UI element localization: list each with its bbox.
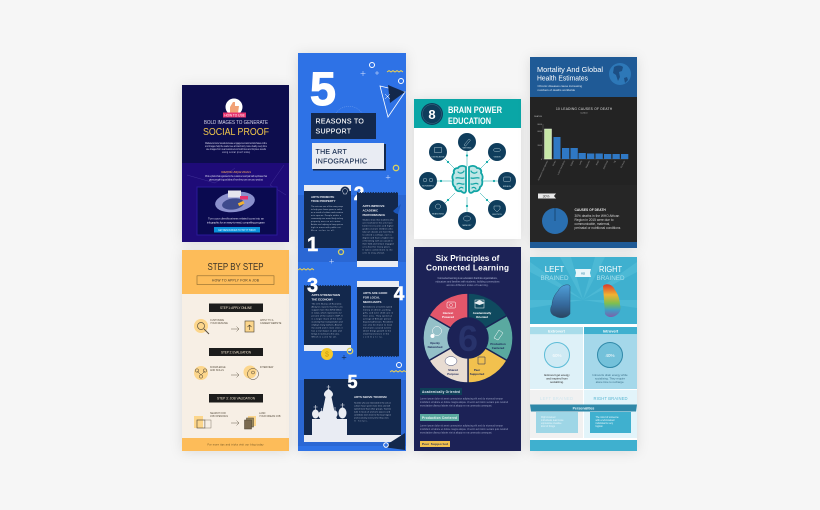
icon: right brain (603, 284, 621, 317)
section: left brained (530, 390, 583, 438)
bar chart: leading causes of death: DEATHS (534, 115, 543, 118)
icon hub: emotion: EMOTION (492, 214, 502, 216)
ribbon: personalities: Personalities (573, 406, 594, 410)
card 2: arts improve performance (357, 193, 401, 267)
card 3: arts strengthen economy: is a larger share of the total (312, 318, 342, 320)
bar chart: leading causes of death (534, 107, 628, 181)
segment label: interest powered: Powered (442, 315, 454, 319)
text block: production centered: incididunt ut labore et dolore magna aliqua. Ut enim ad minim veniam quis nostrud (420, 428, 509, 431)
column: extrovert stat: 60% (552, 353, 562, 358)
callout box (197, 187, 277, 235)
icon hub: vision: VISION (494, 156, 501, 158)
icon hub: knowledge: KNOWLEDGE (431, 156, 445, 158)
number 4: 4 (394, 284, 405, 305)
card 5: arts serve tourism: spend more than other groups. Tourists (354, 408, 391, 410)
title box: reasons to support: REASONS TO (316, 118, 364, 126)
decorative ring and plus (329, 250, 344, 264)
bar chart: leading causes of death: Lower respiratory (557, 160, 566, 175)
step 3 icons: LAND (259, 412, 266, 415)
title box: the art infographic: INFOGRAPHIC (316, 158, 367, 166)
card 2: arts improve performance: Studies show that students who (362, 218, 394, 222)
bar chart: leading causes of death: Road (596, 161, 600, 166)
step 1 icons: CUSTOMIZE (210, 319, 224, 322)
card 4: arts good for merchants: ARTS ARE GOOD (363, 291, 387, 295)
step 1 icons: CAREER WEBSITE (260, 322, 282, 325)
bar chart: leading causes of death: Stroke (552, 159, 557, 167)
text block: causes of death: perinatal or nutritional conditions (574, 226, 621, 230)
column: introvert stat: Introverts drain energy while (592, 373, 628, 377)
step 1 bar (209, 304, 263, 312)
card 3: arts strengthen economy: ARTS STRENGTHEN (312, 293, 340, 297)
card 2: arts improve performance: ARTS IMPROVE (362, 204, 385, 208)
text block: intro: Marketers know visuals increase engagement and social shares online (205, 142, 268, 145)
icon hub: reasoning: REASONING (432, 212, 444, 216)
bar chart: leading causes of death: TB (614, 160, 617, 164)
card 3: arts strengthen economy (304, 286, 351, 351)
step 1 icons (194, 319, 282, 334)
segment label: peer supported: Supported (470, 372, 484, 376)
card 5: arts serve tourism (304, 379, 401, 442)
bar chart: leading causes of death: 0 (541, 159, 543, 161)
panel: step by step infographic (182, 250, 289, 451)
zigzag (298, 268, 314, 270)
card 3: arts strengthen economy: Which is a win for all. (312, 336, 337, 338)
card 3: arts strengthen economy: Analysis reports that the arts (312, 306, 342, 308)
icon hub: movement: MOVEMENT (422, 186, 435, 188)
tag: academically oriented (420, 388, 462, 395)
pie chart (542, 208, 568, 234)
panel: six principles of connected learning (414, 247, 521, 451)
step 3 icons: YOUR DREAM JOB (259, 415, 281, 418)
card 1: arts promote property: as a result of culture and creative (311, 211, 344, 214)
column: extrovert stat: and inspired from (546, 376, 568, 380)
card 2: arts improve performance: their field and remain engaged (362, 242, 394, 246)
text block: purple section: gives people a good idea of how they can use your product (209, 178, 263, 182)
bar chart: leading causes of death: Ischaemic heart disease (537, 159, 549, 181)
text block: production centered: exercitation ullamco laboris nisi ut aliquip ex ea commodo consequat. (420, 432, 492, 434)
card 1: arts promote property: arts spaces. People within a (311, 214, 342, 217)
icon hub: memory: MEMORY (463, 225, 472, 227)
heading: right brained: RIGHT (599, 265, 622, 274)
step 2 icons: KNOWLEDGE (210, 366, 226, 369)
donut chart: six principles (423, 293, 513, 383)
number 2: 2 (354, 184, 364, 205)
step 2 icons: INTERVIEW (260, 366, 274, 369)
card 3: arts strengthen economy: employs many workers. Around (312, 324, 342, 326)
column: extrovert stat: socializing. (550, 380, 564, 384)
bar chart: leading causes of death: Cirrhosis (621, 161, 626, 169)
card 3: arts strengthen economy: brings in revenue to the area. (312, 332, 340, 336)
card 5: arts serve tourism: culture have spent more time and will (354, 404, 391, 408)
segment label: production centered: Production (490, 342, 506, 346)
card 1: arts promote property: More value to all. (311, 229, 335, 232)
card 3: arts strengthen economy: in value, which represents 4.2 (312, 312, 342, 314)
ribbon: vs: VS (581, 272, 585, 276)
text block: intro: use images from real customers to build trust and improve results (206, 148, 267, 151)
segment label: peer supported (470, 357, 485, 376)
panel: social proof infographic (182, 85, 289, 242)
card 4: arts good for merchants: merchants around events (363, 326, 391, 330)
section: right brained: individual is very (596, 422, 614, 425)
card 4: arts good for merchants: gifts, and even child care in (363, 312, 394, 314)
tag: peer supported: Peer Supported (422, 442, 448, 446)
segment label: production centered: Centered (492, 346, 504, 350)
card 1: arts promote property: The arts are one of the many ways (311, 205, 343, 208)
tag: peer supported (420, 441, 450, 447)
icon: brain (452, 166, 483, 193)
segment label: interest powered (442, 302, 456, 319)
card 4: arts good for merchants: beyond admission. Residents (363, 320, 393, 324)
segment label: shared purpose (445, 356, 459, 376)
footer band (530, 440, 637, 451)
card 2: arts improve performance: It takes commitment to the (362, 248, 393, 252)
section: left brained: LEFT BRAINED (540, 396, 573, 401)
card 5: arts serve tourism: and economy every time they visit. (354, 416, 389, 420)
title box: reasons to support (311, 113, 376, 139)
step 1 bar: STEP 1: APPLY ONLINE (220, 306, 252, 310)
number 5 small: 5 (347, 372, 358, 392)
card 3: arts strengthen economy: The U.S. Bureau of Economic (312, 302, 342, 306)
step 1 icons: YOUR RESUME (210, 322, 228, 325)
card 4: arts good for merchants: MERCHANTS (363, 300, 382, 304)
segment label: academically oriented (473, 300, 492, 319)
segment label: openly networked (428, 326, 443, 349)
icon: thumbs up badge: HOW TO USE (224, 114, 245, 118)
bar chart: leading causes of death: number (580, 112, 588, 114)
tag: production centered: Production Centered (422, 416, 457, 420)
bar chart: leading causes of death: Diarrhoeal (603, 160, 609, 170)
text block: causes of death (574, 208, 621, 230)
step 2 icons: AND SKILLS (210, 369, 224, 372)
step 3 icons: SEARCH FOR (210, 412, 226, 415)
text block: causes of death: 30% deaths in the WHO African (574, 214, 620, 218)
column: introvert stat (584, 335, 637, 389)
card 2: arts improve performance: better test scores and higher (362, 224, 394, 228)
card 1: arts promote property: TRUE PROPERTY (311, 199, 336, 203)
panel: brain power education (414, 99, 521, 239)
step 3 bar (209, 394, 263, 402)
decorative icons: triangle and rings (336, 62, 405, 180)
column header: extrovert: Extrovert (548, 330, 566, 334)
subtitle: numbers of deaths worldwide (538, 88, 575, 92)
text block: intro: and images help the reader see a brand story more clearly every time (205, 145, 268, 148)
subtitle: Chronic diseases cause increasing (538, 84, 583, 88)
card 1: arts promote property (304, 185, 351, 248)
ribbon: 30 percent: 30% (543, 194, 549, 198)
heading: social proof: SOCIAL PROOF (203, 127, 269, 138)
card 4: arts good for merchants: Attendees to art events spend (363, 306, 393, 308)
icon: thumbs up badge (223, 98, 246, 118)
card 4: arts good for merchants: which brings growth to the (363, 330, 392, 332)
section: left brained: kind of things (541, 425, 556, 428)
column: extrovert stat: Extrovert get energy (544, 373, 570, 377)
heading: six principles: Connected Learning (426, 264, 509, 272)
card 2: arts improve performance: are involved in the arts have (362, 222, 393, 224)
card 4: arts good for merchants (357, 281, 399, 356)
card 4: arts good for merchants: small businesses in the (363, 332, 390, 336)
segment label: peer supported: Peer (474, 368, 481, 372)
bar chart: leading causes of death: 6000 (538, 131, 543, 133)
icon: lightbulb (340, 186, 350, 196)
column: introvert stat: socializing. They require (595, 376, 625, 380)
title box: the art infographic: THE ART (316, 149, 347, 156)
bar chart: leading causes of death: 2000 (538, 145, 543, 147)
icon: coin (321, 348, 353, 360)
card 4: arts good for merchants: their area. They spend an (363, 314, 393, 318)
text block: academically oriented: Lorem ipsum dolor sit amet consectetur adipiscing elit sed do eiusmod tempor (420, 398, 503, 400)
segment label: interest powered: Interest (443, 311, 453, 315)
subtitle box (197, 276, 274, 284)
card 4: arts good for merchants: FOR LOCAL (363, 296, 380, 300)
ribbon: 30 percent (538, 194, 556, 198)
step 3 icons: JOB OPENINGS (210, 415, 228, 418)
number 1: 1 (307, 234, 318, 256)
card 2: arts improve performance: degree and have a higher rate (362, 236, 394, 240)
text block: causes of death: Region in 2015 were due to (574, 218, 614, 222)
bar chart: leading causes of death: Diabetes (585, 160, 591, 169)
card 2: arts improve performance: to attend a college, earn a (362, 234, 392, 236)
card 5: arts serve tourism: It helps. (354, 420, 368, 422)
card 2: arts improve performance: of finishing with an award in (362, 240, 393, 242)
column: introvert stat: 40% (605, 353, 615, 358)
card 4: arts good for merchants: average of $31 per person (363, 318, 392, 320)
intro text: Connected learning is an education that links organizations, (438, 277, 498, 280)
section: right brained: The mind of someone (596, 416, 619, 419)
segment label: production centered (490, 330, 506, 350)
icon: left brain (551, 285, 570, 318)
card 2: arts improve performance: at school for many years. (362, 246, 391, 248)
step 3 bar: STEP 3: JOB VALIDATION (217, 396, 256, 400)
text block: purple section: Pick a photo that represents the customer and pair with a phrase that (205, 175, 267, 178)
card 3: arts strengthen economy: THE ECONOMY (312, 298, 333, 302)
card 3: arts strengthen economy: has a real impact on jobs and (312, 330, 342, 332)
column header: introvert: Introvert (603, 330, 619, 334)
panel: left brained vs right brained (530, 257, 637, 451)
section: left brained: expressive creative (541, 422, 562, 425)
subtitle box: HOW TO APPLY FOR A JOB (212, 278, 260, 282)
bar chart: leading causes of death: COPD (571, 160, 575, 167)
card 4: arts good for merchants: money on dinner, parking, (363, 308, 391, 312)
text block: causes of death: communicable, maternal, (574, 222, 610, 226)
card 1: arts promote property: high in areas with public art. (311, 226, 341, 229)
column header: introvert (584, 327, 637, 334)
step 2 bar: STEP 2: EVALUATION (221, 350, 252, 354)
segment label: openly networked: Openly (430, 341, 440, 345)
section: left brained: individuals lead more (541, 419, 564, 422)
card 5: arts serve tourism: ARTS SERVE TOURISM (354, 395, 387, 399)
heading: brain power education: EDUCATION (448, 116, 491, 127)
callout box: Turn your client/business related icons into an (208, 216, 264, 220)
section: right brained: RIGHT BRAINED (594, 396, 628, 401)
card 2: arts improve performance: grades overall. Children who (362, 228, 393, 230)
text block: academically oriented: incididunt ut labore et dolore magna aliqua. Ut enim ad minim veniam quis nostrud (420, 401, 509, 404)
bar chart: leading causes of death: 10 LEADING CAUSES OF DEATH (556, 107, 613, 111)
ribbon: personalities (530, 404, 637, 412)
segment label: academically oriented: Oriented (476, 315, 488, 319)
bar chart: leading causes of death: 8000 (538, 124, 543, 126)
column: introvert stat: alone time to recharge. (596, 380, 625, 384)
bar chart: leading causes of death: Lung (579, 161, 583, 165)
heading: six principles: Six Principles of (436, 254, 500, 263)
segment label: shared purpose: Shared (448, 368, 458, 372)
panel: reasons to support art (298, 53, 406, 451)
card 1: arts promote property: to help your home grow in value (311, 208, 343, 211)
heading: brain power education: BRAIN POWER (448, 105, 502, 116)
step 2 icons (194, 366, 274, 380)
section: right brained (584, 390, 637, 438)
card 5: arts serve tourism: take in local art and arts spaces and (354, 410, 391, 414)
heading: left brained: LEFT (545, 265, 564, 274)
tag: academically oriented: Academically Oriented (422, 390, 460, 394)
heading: mortality: Mortality And Global (537, 67, 603, 74)
card 2: arts improve performance: PERFORMANCE (362, 213, 385, 217)
column: extrovert stat (530, 335, 583, 389)
section: left brained: Right-brained (541, 416, 556, 419)
decorative corner triangle (383, 433, 405, 450)
card 3: arts strengthen economy: percent of the nation's GDP. It (312, 314, 343, 318)
card 2: arts improve performance: take art classes are more likely (362, 230, 394, 234)
footer note: For more tips and tricks visit our blog today (208, 444, 264, 446)
ribbon: vs (575, 269, 591, 277)
number 3: 3 (307, 275, 318, 297)
segment label: shared purpose: Purpose (447, 372, 459, 376)
step 2 bar (209, 348, 263, 356)
icon hub: writing: WRITING (463, 148, 472, 150)
icon: onion dome cathedral (312, 385, 347, 436)
card 1: arts promote property: community are more likely to buy (311, 217, 344, 220)
section: right brained: with a left-brained (596, 419, 615, 422)
panel: mortality and global health (530, 57, 637, 248)
title box: reasons to support: SUPPORT (316, 128, 352, 136)
decorative ring and zigzag (390, 362, 406, 372)
heading: right brained: BRAINED (596, 275, 625, 282)
text block: academically oriented: exercitation ullamco laboris nisi ut aliquip ex ea commodo consequat. (420, 404, 492, 408)
intro text: educators and families with students, building connections (436, 280, 500, 284)
connector lines (437, 151, 498, 212)
heading: step by step: STEP BY STEP (208, 262, 264, 273)
column header: extrovert (530, 327, 583, 334)
segment label: academically oriented: Academically (473, 311, 492, 315)
callout box: infographic for an easy-to-read, compelling program (207, 220, 266, 224)
icon: coin: $ (325, 352, 329, 358)
section: right brained: logical. (596, 425, 603, 428)
card 5: arts serve tourism: Tourists who are interested in the arts or (354, 402, 391, 404)
text block: production centered: Lorem ipsum dolor sit amet consectetur adipiscing elit sed do eiusmod tempor (420, 424, 503, 428)
icon hub: speech: SPEECH (503, 186, 512, 188)
card 2: arts improve performance: ACADEMIC (362, 208, 379, 212)
intro text: across different sides of learning. (446, 284, 489, 287)
card 1: arts promote property: property near an art center. (311, 220, 341, 223)
title box: the art infographic (312, 143, 386, 170)
big number 5: 5 (310, 62, 336, 115)
donut chart: six principles: 6 (458, 318, 478, 359)
step 3 icons (194, 412, 281, 429)
card 3: arts strengthen economy: support more than $700 billion (312, 308, 342, 312)
tag: production centered (420, 414, 459, 421)
step 1 icons: APPLY TO A (260, 319, 274, 322)
card 4: arts good for merchants: community. (363, 336, 383, 338)
card 1: arts promote property: ARTS PROMOTE (311, 195, 334, 199)
segment label: openly networked: Networked (428, 345, 443, 349)
text block: intro: using social proof today (222, 151, 251, 154)
card 4: arts good for merchants: can also be drawn to local (363, 324, 393, 326)
text block: purple section: CREATING UNIQUE VISUALS (221, 171, 251, 174)
card 3: arts strengthen economy: economy than transportation and (312, 320, 343, 324)
heading: left brained: BRAINED (540, 275, 569, 282)
text block: causes of death: CAUSES OF DEATH (574, 208, 606, 212)
heading: mortality: Health Estimates (537, 76, 588, 82)
heading: bold images: BOLD IMAGES TO GENERATE (204, 120, 268, 126)
card 5: arts serve tourism: contribute even more to the local region (354, 414, 392, 416)
card 2: arts improve performance: arts to stay ahead. (362, 252, 385, 254)
callout box: GET RESOURCES TO TRY IT TODAY (218, 229, 256, 232)
card 3: arts strengthen economy: the world and in most cities it (312, 326, 343, 330)
badge: number 8: 8 (428, 107, 436, 122)
card 1: arts promote property: Artists are helping to keep prices (311, 223, 343, 226)
icon: globe (609, 63, 631, 85)
